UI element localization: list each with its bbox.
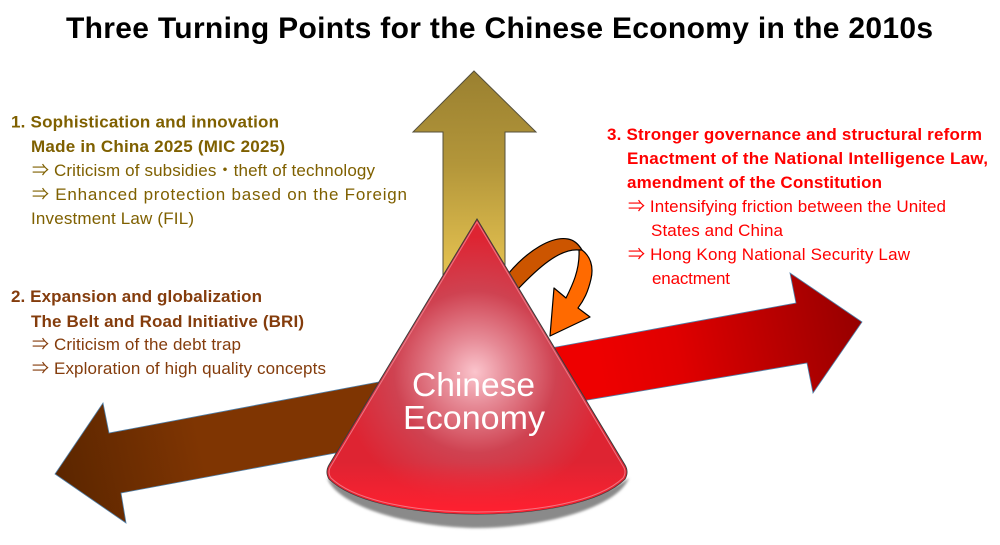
text block: 2. Expansion and globalization: ⇒ Criticism of the debt trap	[32, 335, 241, 354]
cone body	[327, 219, 627, 514]
text block: 1. Sophistication and innovation	[11, 112, 407, 228]
text block: 1. Sophistication and innovation: Investment Law (FIL)	[31, 209, 194, 228]
text block: 3. Stronger governance and structural reform: 3. Stronger governance and structural reform	[607, 125, 982, 144]
cone label: Economy	[403, 399, 546, 436]
cone label: Chinese	[412, 366, 535, 403]
text block: 2. Expansion and globalization: ⇒ Exploration of high quality concepts	[32, 359, 326, 378]
cone: Chinese Economy	[327, 219, 629, 528]
text block: 1. Sophistication and innovation: ⇒ Enhanced protection based on the Foreign	[32, 185, 407, 204]
text block: 1. Sophistication and innovation: ⇒ Criticism of subsidies・theft of technology	[32, 161, 376, 180]
cone shadow	[327, 478, 629, 528]
title: Three Turning Points for the Chinese Economy in the 2010s	[66, 12, 933, 45]
text block: 3. Stronger governance and structural reform: Enactment of the National Intelligence Law,	[627, 149, 988, 168]
text block: 3. Stronger governance and structural reform: ⇒ Intensifying friction between the United	[628, 197, 946, 216]
text block: 3. Stronger governance and structural reform	[607, 125, 988, 288]
cone lower rim	[327, 219, 627, 514]
arrow: left brown	[55, 378, 400, 523]
text block: 3. Stronger governance and structural reform: enactment	[652, 269, 730, 288]
text block: 2. Expansion and globalization	[11, 287, 326, 378]
text block: 3. Stronger governance and structural reform: amendment of the Constitution	[627, 173, 882, 192]
text block: 3. Stronger governance and structural reform: ⇒ Hong Kong National Security Law	[628, 245, 911, 264]
text block: 3. Stronger governance and structural reform: States and China	[651, 221, 784, 240]
text block: 1. Sophistication and innovation: 1. Sophistication and innovation	[11, 112, 279, 132]
cone label	[403, 366, 546, 436]
icon: curved orange rotation arrow	[508, 239, 592, 336]
text block: 2. Expansion and globalization: The Belt and Road Initiative (BRI)	[31, 312, 304, 331]
arrow: right red	[540, 273, 862, 408]
cone highlight edge	[329, 222, 625, 512]
arrow: upward gold	[413, 71, 536, 290]
text block: 2. Expansion and globalization: 2. Expansion and globalization	[11, 287, 262, 306]
text block: 1. Sophistication and innovation: Made in China 2025 (MIC 2025)	[31, 137, 285, 156]
